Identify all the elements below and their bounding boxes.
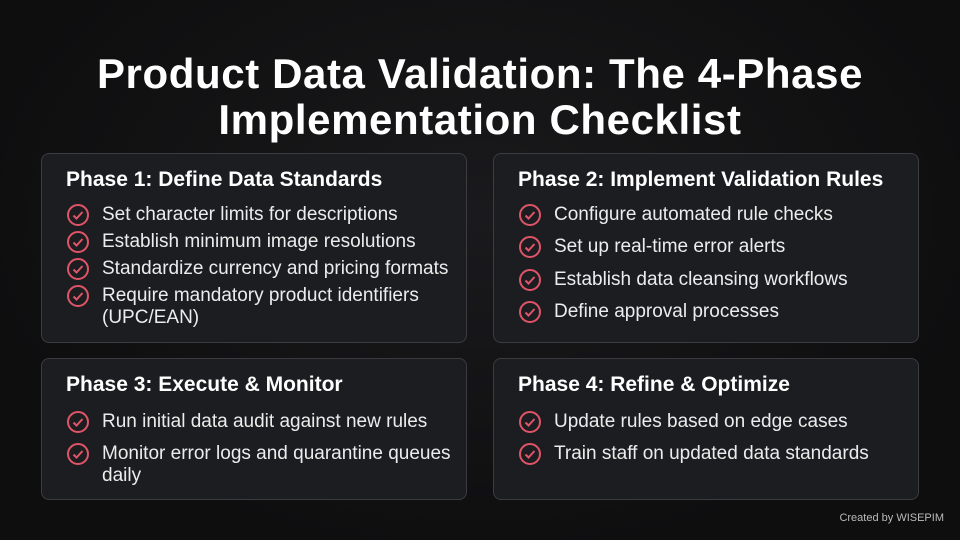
title: Product Data Validation: The 4-Phase (97, 50, 863, 97)
panel: phase 1 (41, 153, 467, 343)
item: Update rules based on edge cases (554, 411, 848, 432)
item: Set up real-time error alerts (554, 236, 785, 257)
heading: phase 2: Phase 2: Implement Validation Rules (518, 168, 883, 191)
item: Establish data cleansing workflows (554, 269, 848, 290)
item: daily (102, 465, 141, 486)
item: Monitor error logs and quarantine queues (102, 443, 451, 464)
panel: phase 2 (493, 153, 919, 343)
item: Define approval processes (554, 301, 779, 322)
item (67, 285, 419, 328)
title (97, 50, 863, 143)
item: Standardize currency and pricing formats (102, 258, 448, 279)
item: Set character limits for descriptions (102, 204, 398, 225)
item: Require mandatory product identifiers (102, 285, 419, 306)
panel: phase 4 (493, 358, 919, 500)
item: Establish minimum image resolutions (102, 231, 416, 252)
heading: phase 4: Phase 4: Refine & Optimize (518, 373, 790, 396)
item (67, 443, 451, 486)
heading: phase 3: Phase 3: Execute & Monitor (66, 373, 343, 396)
footer credit: Created by WISEPIM (839, 512, 944, 524)
panel: phase 3 (41, 358, 467, 500)
title: Implementation Checklist (218, 96, 742, 143)
item: Configure automated rule checks (554, 204, 833, 225)
heading: phase 1: Phase 1: Define Data Standards (66, 168, 382, 191)
item: Train staff on updated data standards (554, 443, 869, 464)
item: (UPC/EAN) (102, 307, 199, 328)
item: Run initial data audit against new rules (102, 411, 427, 432)
